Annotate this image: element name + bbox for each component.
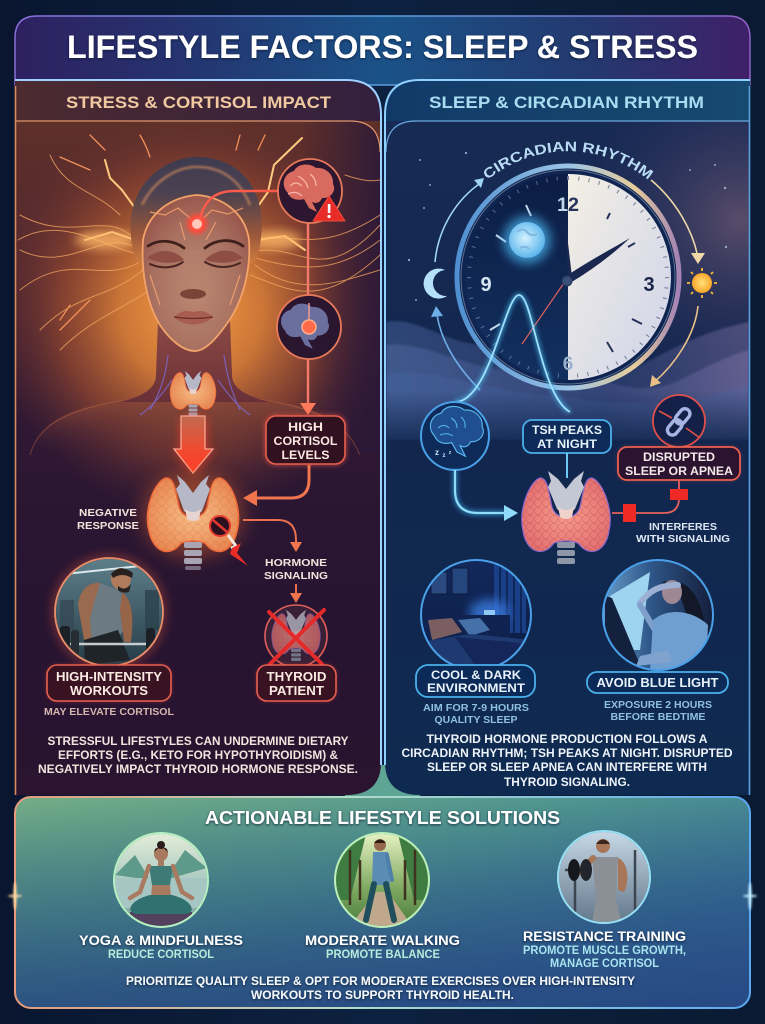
text: sleep summary: SLEEP OR SLEEP APNEA CAN INTERFERE WITH — [427, 760, 707, 774]
text: exposure before bedtime: BEFORE BEDTIME — [610, 711, 706, 723]
label: circadian rhythm arc text — [484, 151, 652, 183]
illustration: walking — [335, 833, 429, 927]
illustration: thyroid, sleep panel — [522, 471, 610, 564]
illustration: high-intensity workout photo — [51, 554, 167, 670]
text: resistance training — [523, 929, 686, 970]
text: solutions summary — [126, 974, 635, 1002]
illustration: circadian clock: 3 — [643, 274, 655, 296]
callout: TSH peaks at night: AT NIGHT — [537, 439, 597, 451]
label: hormone signaling: HORMONE — [265, 557, 327, 569]
callout: high cortisol levels: HIGH — [288, 420, 323, 434]
text: yoga and mindfulness: REDUCE CORTISOL — [108, 949, 214, 961]
callout: high-intensity workouts: HIGH-INTENSITY — [56, 670, 163, 684]
illustration: sleep waves — [386, 321, 749, 440]
heading: sleep and circadian rhythm: SLEEP & CIRCADIAN RHYTHM — [429, 93, 704, 112]
illustration: shoulders — [38, 397, 351, 444]
icon: brain with warning — [278, 159, 345, 223]
callout: high-intensity workouts — [47, 665, 171, 701]
icon: crescent moon — [424, 269, 447, 299]
text: sleep summary — [402, 732, 733, 789]
callout: high cortisol levels — [266, 416, 345, 464]
text: sleep summary: CIRCADIAN RHYTHM; TSH PEAKS AT NIGHT. DISRUPTED — [402, 746, 733, 760]
text: sleep summary: THYROID SIGNALING. — [504, 775, 630, 789]
callout: disrupted sleep or apnea: DISRUPTED — [643, 452, 715, 464]
illustration: hair — [131, 157, 262, 264]
callout: thyroid patient — [257, 665, 336, 701]
text: yoga and mindfulness — [79, 933, 243, 961]
callout: avoid blue light: AVOID BLUE LIGHT — [596, 676, 719, 690]
illustration: circadian clock: 9 — [480, 274, 492, 296]
arrow: interference line — [612, 480, 688, 522]
callout: TSH peaks at night: TSH PEAKS — [532, 425, 602, 437]
icon: sleeping brain: z — [442, 453, 446, 459]
icon: moon — [503, 216, 551, 264]
panel: sleep and circadian rhythm: CIRCADIAN RHYTHM — [484, 142, 654, 180]
callout: disrupted sleep or apnea: SLEEP OR APNEA — [625, 466, 733, 478]
icon: sleeping brain: z — [449, 450, 452, 456]
illustration: neck — [120, 320, 270, 402]
chart: TSH peak curve — [455, 295, 570, 412]
frame: title band — [15, 16, 750, 85]
text: exposure before bedtime: EXPOSURE 2 HOURS — [604, 699, 712, 711]
callout: high-intensity workouts: WORKOUTS — [70, 684, 148, 698]
text: may elevate cortisol: MAY ELEVATE CORTISOL — [44, 706, 175, 718]
text: exposure before bedtime — [604, 699, 712, 723]
illustration: face — [143, 195, 249, 351]
callout: high cortisol levels: CORTISOL — [274, 434, 338, 448]
callout: cool and dark environment: ENVIRONMENT — [427, 683, 525, 695]
icon: thyroid patient crossed — [265, 605, 327, 667]
icon: broken chain — [653, 395, 705, 447]
text: aim for 7-9 hours: QUALITY SLEEP — [434, 714, 518, 726]
arrow: brain to thyroid — [455, 470, 518, 521]
illustration: yoga — [114, 833, 208, 927]
text: moderate walking — [305, 933, 460, 961]
callout: cool and dark environment — [416, 665, 535, 697]
label: interferes with signaling: INTERFERES — [649, 521, 717, 533]
text: moderate walking: MODERATE WALKING — [305, 933, 460, 948]
callout: disrupted sleep or apnea — [618, 447, 740, 480]
text: resistance training: PROMOTE MUSCLE GROWTH, — [523, 945, 686, 957]
arrow: cortisol to thyroid — [243, 465, 309, 506]
heading: actionable lifestyle solutions: ACTIONABLE LIFESTYLE SOLUTIONS — [205, 808, 560, 828]
illustration: small thyroid at neck — [170, 371, 216, 418]
arrow: signaling to patient — [290, 584, 302, 603]
arrows: circadian cycle — [435, 180, 698, 390]
callout: avoid blue light — [587, 672, 728, 693]
illustration: cool dark bedroom — [420, 560, 532, 672]
label: interferes with signaling: WITH SIGNALING — [636, 533, 730, 545]
illustration: stars — [408, 152, 727, 301]
label: negative response: NEGATIVE — [79, 507, 137, 519]
text: aim for 7-9 hours — [423, 702, 529, 726]
icon: sleeping brain: z — [435, 448, 439, 457]
arrow: big down arrow — [174, 416, 214, 474]
text: yoga and mindfulness: YOGA & MINDFULNESS — [79, 933, 243, 948]
text: resistance training: MANAGE CORTISOL — [550, 958, 659, 970]
text: aim for 7-9 hours: AIM FOR 7-9 HOURS — [423, 702, 529, 714]
callout: high cortisol levels: LEVELS — [282, 448, 330, 462]
panel: sleep and circadian rhythm — [384, 79, 750, 795]
label: negative response — [78, 509, 138, 529]
panel: stress and cortisol impact — [15, 80, 381, 795]
panel: actionable lifestyle solutions — [8, 797, 757, 1008]
text: stress summary: EFFORTS (E.G., KETO FOR HYPOTHYROIDISM) & — [58, 748, 338, 762]
panel: solutions backdrop notch — [345, 765, 420, 797]
illustration: circadian clock: 12 — [557, 195, 579, 216]
illustration: circadian clock: 6 — [563, 354, 573, 375]
label: hormone signaling — [264, 559, 328, 579]
icon: forehead stress marker — [187, 214, 207, 234]
callout: cool and dark environment: COOL & DARK — [431, 670, 522, 682]
text: sleep summary: THYROID HORMONE PRODUCTION FOLLOWS A — [426, 732, 708, 746]
text: stress summary: STRESSFUL LIFESTYLES CAN UNDERMINE DIETARY — [48, 734, 348, 748]
illustration: woman at blue screen — [600, 560, 714, 672]
text: moderate walking: PROMOTE BALANCE — [326, 949, 440, 961]
text: stress summary — [38, 736, 358, 773]
label: interferes with signaling — [636, 521, 730, 545]
callout: thyroid patient: THYROID — [266, 670, 326, 684]
illustration: energy strands — [18, 135, 380, 350]
arrow: forehead to brain — [200, 191, 280, 218]
text: resistance training: RESISTANCE TRAINING — [523, 929, 686, 944]
illustration: circadian clock — [457, 166, 679, 388]
arrow: brain to hypothalamus to cortisol — [300, 222, 316, 415]
icon: sun — [687, 268, 717, 298]
arrow: thyroid to hormone signaling — [243, 520, 302, 552]
decorative glints — [8, 882, 757, 910]
illustration: large thyroid — [143, 473, 248, 570]
heading: stress and cortisol impact: STRESS & CORTISOL IMPACT — [66, 93, 332, 112]
illustration: resistance training — [558, 831, 650, 923]
text: solutions summary: WORKOUTS TO SUPPORT THYROID HEALTH. — [251, 988, 514, 1002]
icon: brain with hypothalamus — [277, 295, 341, 359]
text: stress summary: NEGATIVELY IMPACT THYROID HORMONE RESPONSE. — [38, 762, 358, 776]
label: negative response: RESPONSE — [77, 520, 139, 532]
text: solutions summary: PRIORITIZE QUALITY SLEEP & OPT FOR MODERATE EXERCISES OVER HIGH-INTENSITY — [126, 974, 635, 988]
label: hormone signaling: SIGNALING — [264, 570, 328, 582]
icon: sleeping brain — [421, 402, 489, 470]
callout: TSH peaks at night — [523, 420, 611, 453]
callout: thyroid patient: PATIENT — [269, 684, 324, 698]
title: LIFESTYLE FACTORS: SLEEP & STRESS — [67, 29, 698, 65]
